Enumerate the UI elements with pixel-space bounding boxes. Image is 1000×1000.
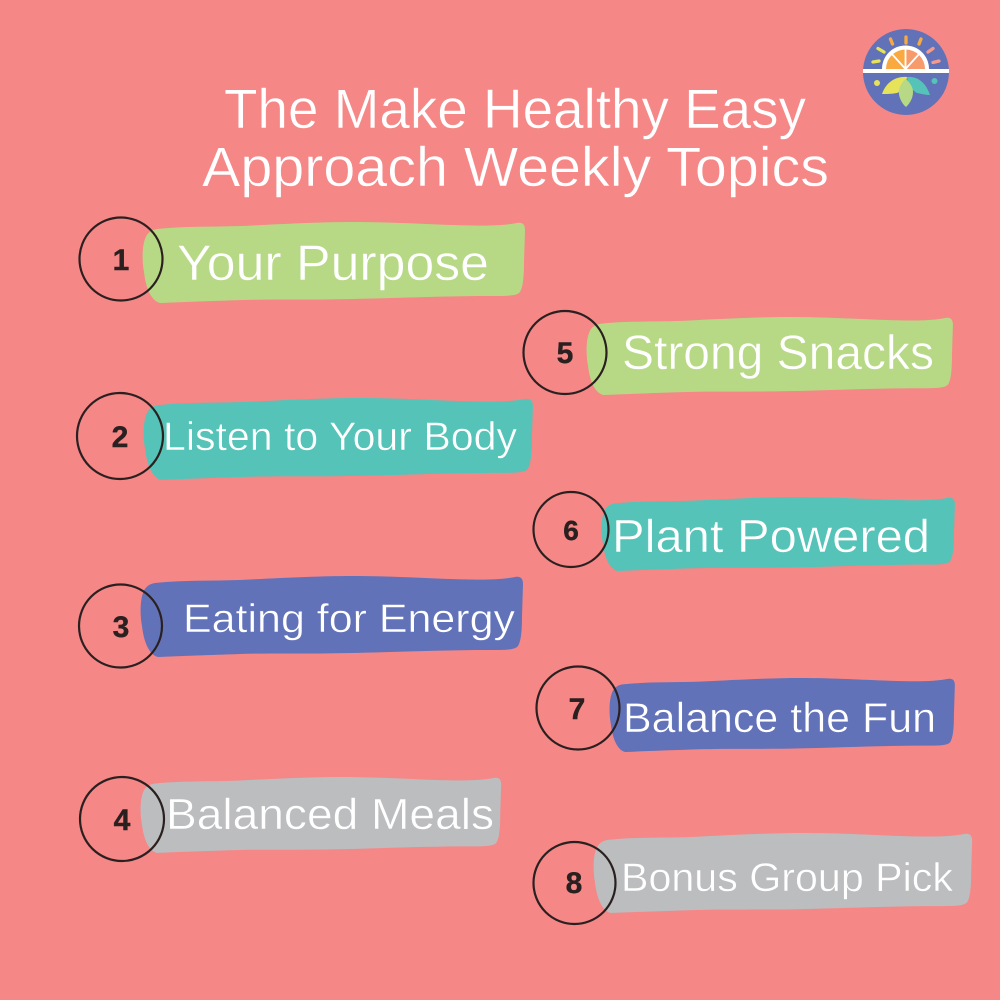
topic 8 — [534, 833, 972, 924]
title: Approach Weekly Topics — [202, 135, 829, 198]
topic 1 — [80, 218, 525, 303]
topic 3 — [79, 576, 523, 668]
label: Bonus Group Pick: Bonus Group Pick — [621, 856, 954, 900]
number circle 8 — [534, 842, 616, 924]
number circle 2: 2 — [112, 421, 128, 454]
topic 4 — [80, 777, 501, 861]
label: Listen to Your Body: Listen to Your Body — [163, 415, 517, 459]
number circle 1 — [80, 218, 162, 300]
topic 7 — [536, 666, 955, 752]
number circle 3 — [79, 584, 162, 668]
label: Plant Powered: Plant Powered — [612, 510, 930, 562]
label: Strong Snacks: Strong Snacks — [622, 327, 934, 380]
number circle 7 — [536, 666, 620, 750]
title: The Make Healthy Easy — [224, 77, 806, 140]
label: Your Purpose: Your Purpose — [177, 235, 489, 291]
number circle 3: 3 — [113, 611, 129, 644]
label: Balance the Fun: Balance the Fun — [623, 694, 936, 741]
number circle 4 — [80, 777, 164, 861]
number circle 4: 4 — [114, 804, 131, 837]
logo — [863, 29, 949, 115]
number circle 8: 8 — [566, 867, 582, 900]
number circle 2 — [77, 393, 163, 479]
number circle 6 — [534, 492, 608, 567]
number circle 5 — [524, 311, 606, 394]
title — [202, 77, 829, 198]
label: Eating for Energy: Eating for Energy — [183, 597, 515, 641]
number circle 1: 1 — [113, 244, 129, 277]
topic 2 — [77, 393, 533, 480]
number circle 5: 5 — [557, 337, 573, 370]
topic 5 — [524, 311, 953, 395]
label: Balanced Meals: Balanced Meals — [166, 790, 494, 839]
number circle 7: 7 — [569, 693, 585, 726]
topic 6 — [534, 492, 955, 571]
number circle 6: 6 — [563, 515, 579, 546]
